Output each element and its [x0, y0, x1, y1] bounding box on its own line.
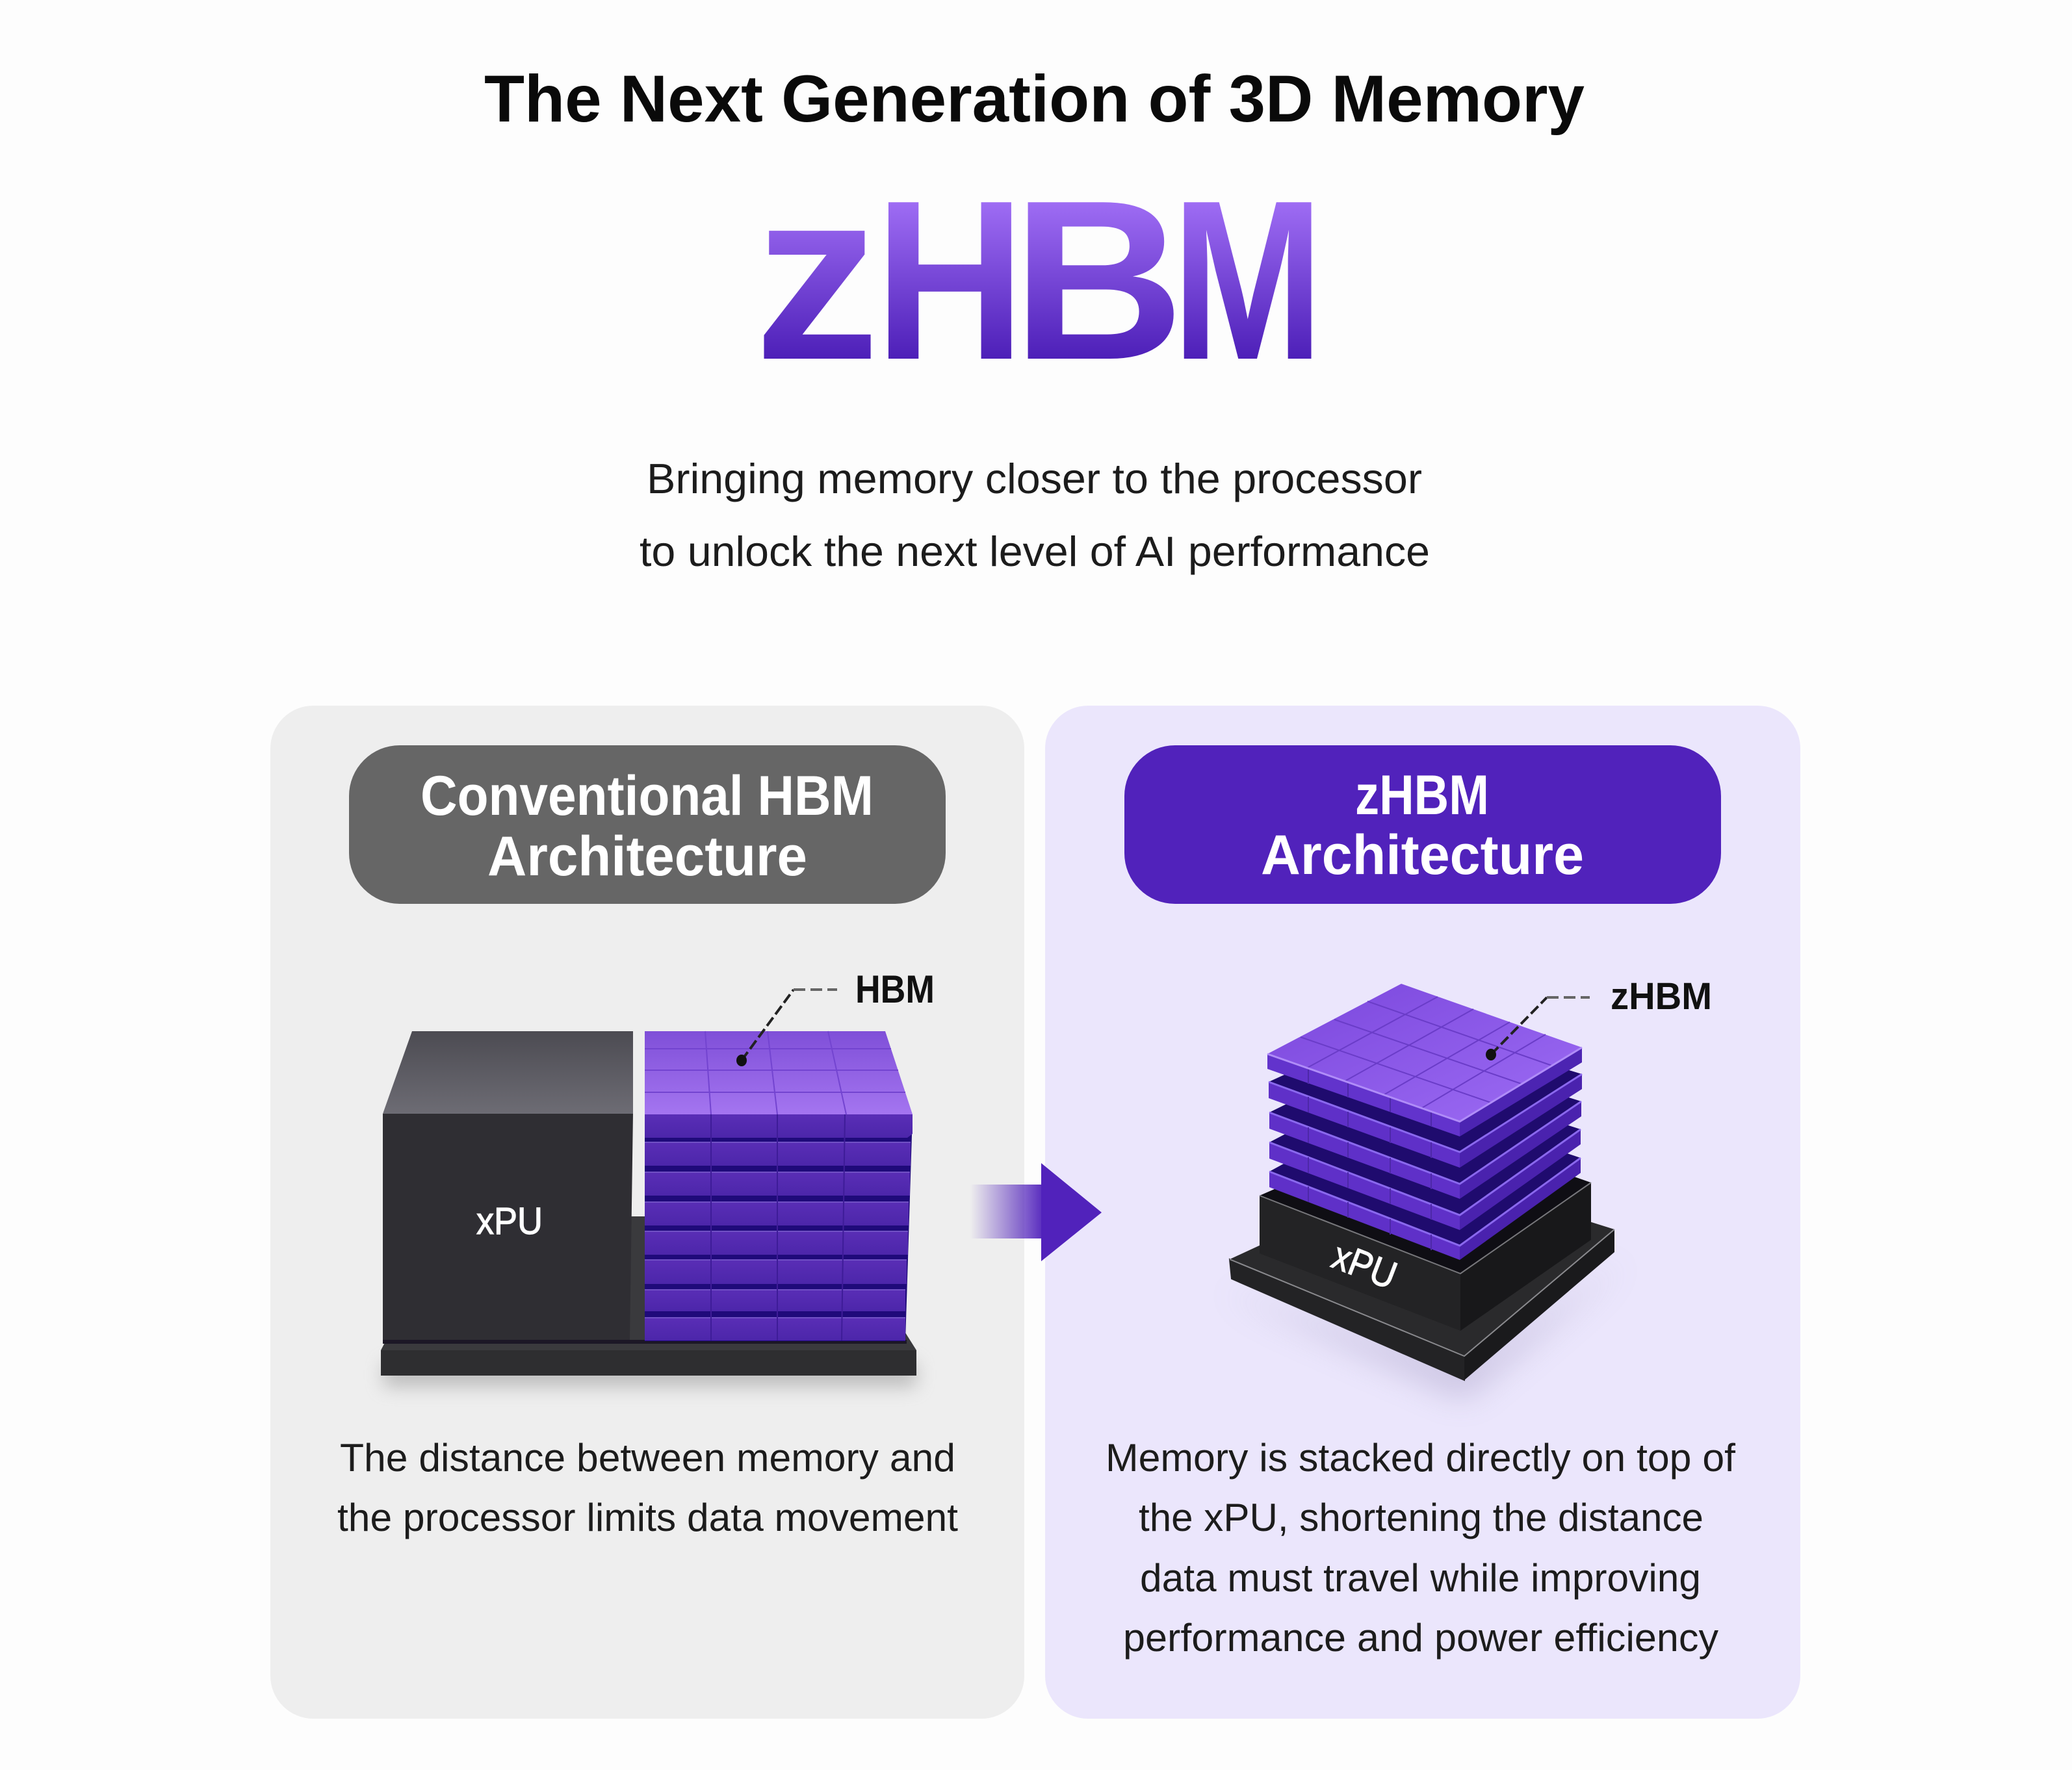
memory stack	[1267, 984, 1582, 1260]
panel: conventional HBM	[270, 706, 1024, 1719]
logo: zHBM: H	[875, 153, 1026, 407]
heading pill: Conventional HBM Architecture	[349, 745, 946, 904]
logo: zHBM	[754, 140, 1323, 410]
callout: zHBM	[1486, 975, 1712, 1060]
layer 5	[1269, 1098, 1581, 1246]
description: zHBM	[1106, 1436, 1735, 1660]
heading pill: zHBM Architecture: Architecture	[1261, 824, 1584, 886]
xPU block: xPU	[1327, 1233, 1403, 1298]
logo: zHBM: B	[1012, 153, 1184, 407]
heading pill: zHBM Architecture	[1124, 745, 1721, 904]
description: zHBM: performance and power efficiency	[1123, 1616, 1718, 1660]
description: zHBM: Memory is stacked directly on top of	[1106, 1436, 1735, 1480]
heading pill: zHBM Architecture: zHBM	[1355, 764, 1489, 827]
base plate shadow	[383, 1363, 916, 1387]
description: conventional HBM: the processor limits data movement	[337, 1496, 958, 1539]
xPU block	[1260, 1124, 1591, 1331]
layer 2	[1269, 1020, 1582, 1152]
description: conventional HBM: The distance between memory and	[340, 1436, 955, 1480]
panel: zHBM	[1045, 706, 1800, 1719]
layer 3	[1269, 1046, 1581, 1184]
layer 1	[1267, 1054, 1460, 1136]
HBM stack	[645, 1031, 913, 1341]
illustration: zHBM stacked on xPU	[1222, 975, 1712, 1397]
panel background	[1045, 706, 1800, 1719]
xPU cube: xPU	[476, 1200, 543, 1242]
base plate	[381, 1216, 916, 1376]
xPU cube	[383, 1031, 633, 1340]
subtitle	[640, 455, 1430, 575]
arrow	[970, 1163, 1102, 1261]
subtitle: to unlock the next level of AI performance	[640, 528, 1430, 575]
layer 4	[1269, 1072, 1581, 1215]
heading pill: Conventional HBM Architecture: Conventional HBM	[421, 765, 874, 827]
callout: zHBM: zHBM	[1611, 975, 1712, 1018]
soft shadow	[1222, 1261, 1625, 1397]
callout: HBM	[736, 968, 935, 1066]
description: zHBM: the xPU, shortening the distance	[1139, 1496, 1703, 1539]
description: conventional HBM	[337, 1436, 958, 1539]
illustration: xPU beside HBM stack	[381, 968, 935, 1387]
panel background	[270, 706, 1024, 1719]
base plate	[1230, 1170, 1614, 1380]
heading pill: Conventional HBM Architecture: Architecture	[487, 825, 807, 888]
callout: HBM: HBM	[855, 968, 935, 1011]
title: The Next Generation of 3D Memory	[484, 62, 1585, 136]
description: zHBM: data must travel while improving	[1140, 1556, 1701, 1600]
subtitle: Bringing memory closer to the processor	[647, 455, 1422, 502]
logo: zHBM: M	[1172, 153, 1323, 407]
logo: zHBM: z	[754, 140, 880, 410]
